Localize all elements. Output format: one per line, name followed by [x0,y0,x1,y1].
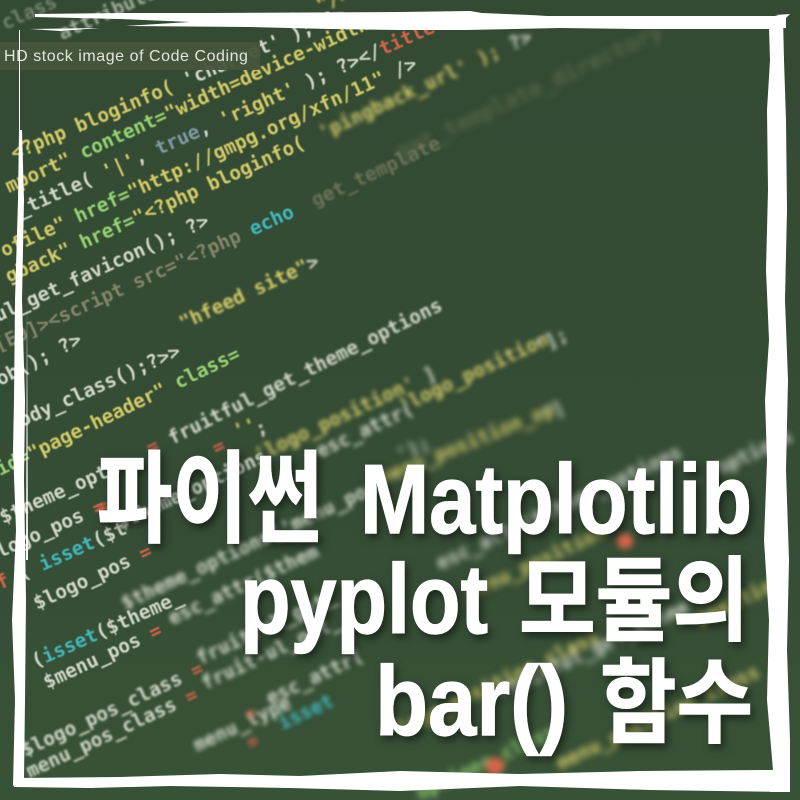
far blurred code lines, right side: menu_position_class [552,660,763,775]
strongly blurred code lines [117,25,572,757]
strongly blurred code lines: fruitful_get_ [192,584,340,670]
strongly blurred code lines: = [242,729,263,755]
strongly blurred code lines: isset [274,689,337,735]
strongly blurred code lines: esc_attr($them [164,540,322,630]
mid-blur code lines: $theme_options [112,445,270,535]
strongly blurred code lines: 'pingback_url' ); ?> [314,25,536,145]
image caption tooltip [0,42,260,70]
far blurred code lines, right side: '); [392,431,434,467]
strongly blurred code lines: $theme_options['menu_pos [117,475,381,615]
strongly blurred code lines: menu_type [189,691,294,757]
strongly blurred code lines: ']; [530,323,572,359]
far blurred code lines, right side: logo_position_class [392,625,603,740]
mid-blur code lines: '' [230,413,260,443]
title: 모듈의 [519,551,749,653]
mid-blur code lines: menu_pos_class = [22,683,201,783]
mid-blur code lines: ; [252,415,271,441]
far blurred code lines, right side [376,20,796,800]
sharp code lines, upper left: ody_class();?>> [15,339,184,432]
sharp code lines, upper left [0,2,438,694]
frame: top edge [35,11,786,30]
title: pyplot [240,544,488,654]
mid-blur code lines: fruitful_get_theme_options [164,293,446,449]
sharp code lines, upper left: $logo_pos = [29,539,156,615]
frame: right edge [764,17,790,792]
sharp code lines, upper left: <?php bloginfo( 'charset' ); ?> [7,2,349,165]
far blurred code lines, right side: menu_position_op [376,397,558,489]
far blurred code lines, right side: fruitful_get_theme [492,595,693,705]
far blurred code lines, right side: options [712,424,796,480]
faint code lines along the top edge [0,0,354,45]
image caption tooltip: HD stock image of Code Coding [4,48,249,65]
far blurred code lines, right side: esc_attr($theme_options [432,440,685,575]
frame: left edge [12,130,26,786]
faint code lines along the top edge: " [283,9,303,35]
mid-blur code lines: "hfeed site"> [175,250,323,335]
sharp code lines, upper left: ofile" href="http://gmpg.org/xfn/11" /> [0,52,420,262]
mid-blur code lines: = [92,494,113,520]
mid-blur code lines: $logo_pos_class = [17,657,207,762]
strongly blurred code lines: fruit-ul_get_ [197,609,345,695]
sharp code lines, upper left: gback" href="<?php bloginfo( [2,131,309,288]
mid-blur code lines: = [208,434,229,460]
far blurred code lines, right side: menu_position [462,520,610,605]
strongly blurred code lines: 'logo_position [394,328,552,418]
strongly blurred code lines: esc_attr( [262,644,367,710]
title [97,444,753,756]
mid-blur code lines: = [142,434,163,460]
frame: bottom edge [14,769,790,792]
title: 파이썬 [97,444,323,556]
far blurred code lines, right side: '] [537,396,568,427]
strongly blurred code lines: = [240,701,261,727]
sharp code lines, upper left: $menu_pos = [39,618,166,694]
sharp code lines, upper left: _title( '|', true, 'right' ); ?></title [13,15,438,222]
far blurred code lines, right side: position [692,569,787,630]
sharp code lines, upper left: (isset($theme_ [28,585,187,673]
sharp code lines, upper left: mport" content="width=device-width [2,12,372,198]
mid-blur code lines: get_template [307,131,444,212]
far blurred code lines, right side: get_template_directory [392,20,667,165]
strongly blurred code lines: esc_attr( [312,397,417,463]
strongly blurred code lines: 'logo_position' ] [250,362,440,467]
title: 함수 [600,653,753,755]
mid-blur code lines [17,131,446,783]
title: bar() [375,646,568,756]
